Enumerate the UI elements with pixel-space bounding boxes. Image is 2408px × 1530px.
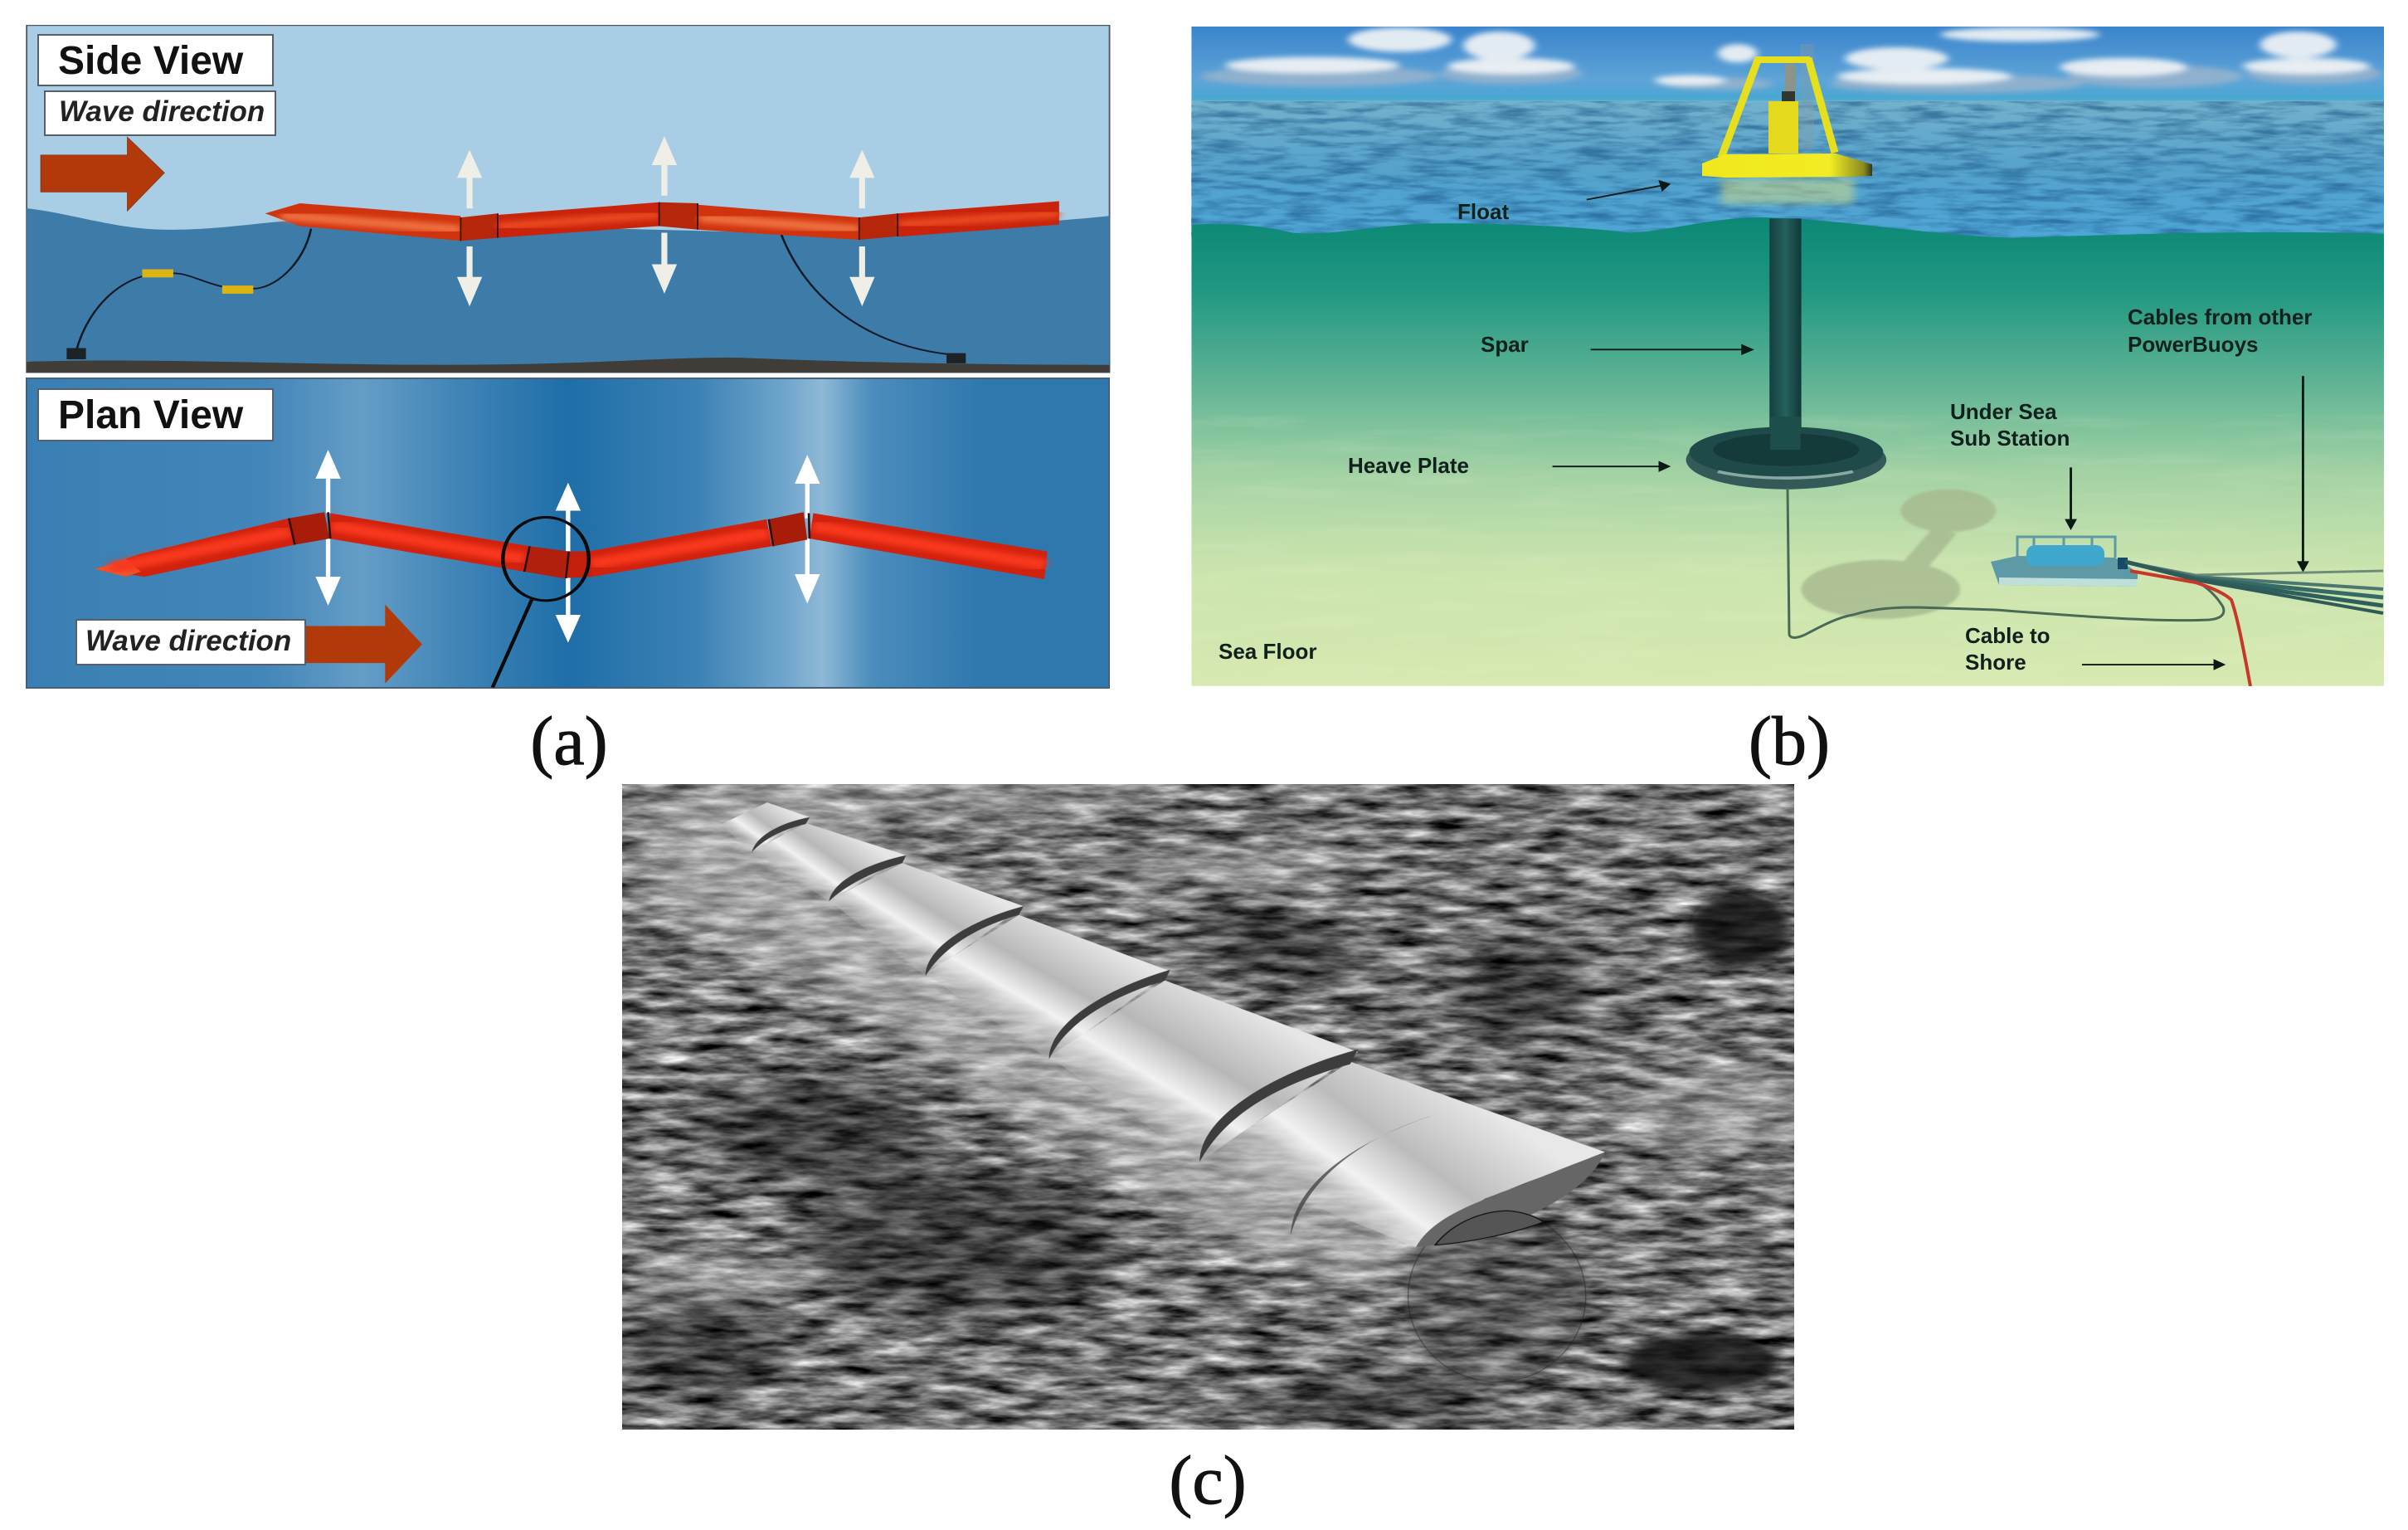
cables bbox=[1788, 488, 2383, 686]
labels for buoy diagram: Heave Plate bbox=[1348, 453, 1469, 478]
wave direction label bbox=[45, 91, 275, 135]
side view sky bbox=[27, 26, 1110, 373]
heave plate bbox=[1686, 417, 1886, 490]
labels for buoy diagram: Cable to bbox=[1965, 623, 2050, 648]
plan view red tube bbox=[95, 512, 1048, 579]
labels for buoy diagram bbox=[1219, 199, 2313, 675]
leader arrows bbox=[1553, 180, 2308, 670]
labels for buoy diagram: Spar bbox=[1481, 332, 1529, 357]
labels for buoy diagram: Cables from other bbox=[2128, 305, 2313, 329]
sub station bbox=[1991, 537, 2138, 587]
plan view wave direction arrow bbox=[304, 605, 422, 684]
plan view label: Plan View bbox=[58, 393, 244, 437]
sea surface bbox=[1191, 100, 2384, 238]
red segmented tube bbox=[265, 202, 1059, 241]
black rocks bbox=[1624, 893, 1790, 1391]
clouds bbox=[1201, 27, 2381, 93]
wave direction arrow bbox=[41, 137, 164, 211]
segment 2 bbox=[752, 823, 906, 901]
spar bbox=[1769, 218, 1802, 442]
wave direction label: Wave direction bbox=[59, 95, 265, 128]
underwater gradient bbox=[1191, 217, 2384, 686]
heave arrows bbox=[457, 136, 875, 306]
segment 1 bbox=[721, 802, 810, 852]
detail circle and leader line bbox=[493, 517, 589, 688]
plan view heave arrows bbox=[315, 450, 820, 643]
seabed bbox=[27, 358, 1110, 373]
segment 6 bbox=[1199, 1061, 1605, 1247]
front end face bbox=[1416, 1152, 1605, 1247]
panel b: buoy diagram bbox=[1191, 27, 2384, 686]
plan view background bbox=[27, 378, 1109, 688]
labels for buoy diagram: Under Sea bbox=[1950, 399, 2057, 424]
light water patches bbox=[613, 768, 1810, 1301]
float buoy bbox=[1702, 44, 1872, 204]
labels for buoy diagram: Float bbox=[1457, 199, 1509, 224]
panel a: side view bbox=[27, 26, 1110, 373]
surface ripples bbox=[1191, 101, 2384, 238]
panel c: attenuator render bbox=[613, 768, 1810, 1430]
device joints bbox=[752, 817, 1433, 1235]
side view label: Side View bbox=[58, 39, 244, 83]
sea texture bbox=[622, 784, 1794, 1430]
side view label bbox=[38, 35, 273, 85]
caption a: (a) bbox=[530, 703, 608, 780]
labels for buoy diagram: Sea Floor bbox=[1219, 639, 1316, 664]
inner end ellipse bbox=[1435, 1211, 1543, 1245]
plan view label bbox=[38, 389, 273, 441]
mooring cables bbox=[76, 229, 951, 354]
labels for buoy diagram: Shore bbox=[1965, 650, 2026, 675]
segment 5 bbox=[1049, 981, 1358, 1162]
caption b: (b) bbox=[1749, 703, 1830, 780]
dark water patches bbox=[613, 889, 1593, 1424]
segment 3 bbox=[829, 863, 1024, 976]
labels for buoy diagram: PowerBuoys bbox=[2128, 332, 2258, 357]
labels for buoy diagram: Sub Station bbox=[1950, 426, 2070, 451]
plan view wave direction label bbox=[76, 620, 305, 665]
sky bbox=[1191, 27, 2384, 103]
seabed ripples bbox=[1191, 417, 2384, 490]
wave device body bbox=[721, 802, 1605, 1247]
seabed shadow bbox=[1802, 490, 1996, 619]
segment 4 bbox=[926, 915, 1170, 1060]
mooring floats and anchors bbox=[66, 270, 966, 363]
panel a: plan view bbox=[27, 378, 1109, 688]
caption c: (c) bbox=[1169, 1442, 1247, 1519]
side view water bbox=[27, 208, 1110, 373]
plan view wave direction label: Wave direction bbox=[85, 625, 291, 657]
mist around device bbox=[644, 792, 1447, 1291]
submerged end section bbox=[1406, 1208, 1588, 1384]
